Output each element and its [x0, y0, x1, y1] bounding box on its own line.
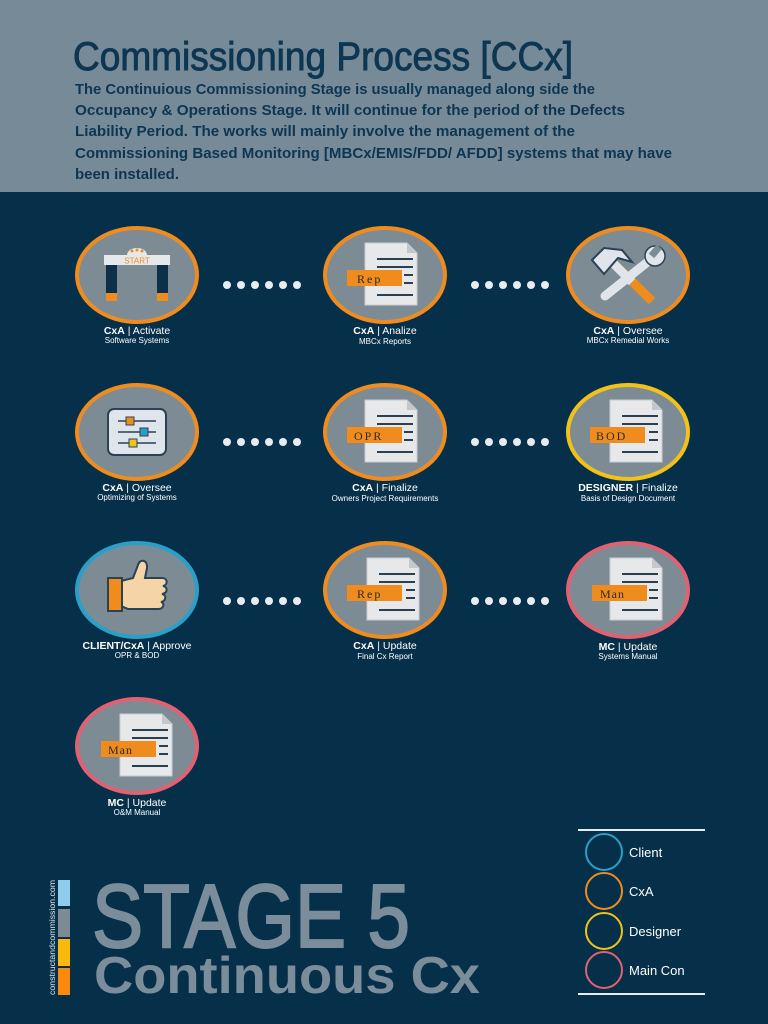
step: update final Cx report: CxA | Update [353, 640, 417, 652]
intro paragraph: been installed. [75, 166, 179, 183]
legend: Client [629, 845, 663, 860]
step: update O&M manual: MC | Update [108, 797, 167, 809]
step: approve OPR & BOD: CLIENT/CxA | Approve [83, 640, 192, 652]
step: oversee remedial works: MBCx Remedial Works [587, 336, 669, 345]
legend [578, 830, 705, 994]
step: update final Cx report [325, 543, 445, 661]
step: finalize OPR [325, 385, 445, 503]
step: update systems manual: Systems Manual [598, 652, 658, 661]
icon: start gate: START [124, 256, 150, 266]
step: finalize BOD [568, 385, 688, 503]
legend: Main Con [629, 963, 685, 978]
icon: thumbs up [108, 561, 167, 611]
step: oversee remedial works [568, 228, 688, 345]
step: optimizing of systems: CxA | Oversee [102, 482, 172, 494]
step: analize MBCx reports: CxA | Analize [353, 325, 417, 337]
color bar strip [58, 880, 70, 995]
step: optimizing of systems [77, 385, 197, 502]
step: update O&M manual [77, 699, 197, 817]
stage heading: STAGE 5 [92, 867, 410, 967]
intro paragraph: Occupancy & Operations Stage. It will continue for the period of the Defects [75, 102, 625, 119]
step: update systems manual [568, 543, 688, 661]
step: activate software systems: CxA | Activate [104, 325, 170, 337]
step: analize MBCx reports: MBCx Reports [359, 337, 411, 346]
step: finalize BOD: BOD [596, 429, 627, 443]
step: finalize BOD: Basis of Design Document [581, 494, 676, 503]
legend: CxA [629, 884, 654, 899]
intro paragraph: Liability Period. The works will mainly involve the management of the [75, 123, 575, 140]
website side label: constructandcommission.com [48, 880, 57, 995]
stage subtitle: Continuous Cx [94, 947, 480, 1005]
step: approve OPR & BOD: OPR & BOD [115, 651, 159, 660]
step: update O&M manual: Man [108, 743, 133, 757]
intro paragraph: The Continuious Commissioning Stage is usually managed along side the [75, 81, 595, 98]
legend: Designer [629, 924, 682, 939]
icon: hammer and wrench [592, 244, 665, 301]
step: update final Cx report: Final Cx Report [357, 652, 414, 661]
icon: sliders panel [108, 409, 166, 455]
step: finalize OPR: OPR [354, 429, 383, 443]
step: approve OPR & BOD [77, 543, 197, 660]
intro paragraph: Commissioning Based Monitoring [MBCx/EMIS/FDD/ AFDD] systems that may have [75, 145, 672, 162]
title: Commissioning Process [CCx] [73, 35, 573, 79]
intro paragraph [75, 81, 672, 183]
step: activate software systems: Software Systems [105, 336, 169, 345]
step: update final Cx report: Rep [357, 587, 382, 601]
step: analize MBCx reports: Rep [357, 272, 382, 286]
step: update O&M manual: O&M Manual [114, 808, 161, 817]
step: activate software systems [77, 228, 197, 345]
step: oversee remedial works: CxA | Oversee [593, 325, 663, 337]
header panel [0, 0, 768, 192]
step: optimizing of systems: Optimizing of Systems [97, 493, 177, 502]
step: update systems manual: MC | Update [599, 641, 658, 653]
step: analize MBCx reports [325, 228, 445, 346]
step: finalize BOD: DESIGNER | Finalize [578, 482, 678, 494]
dot connectors [223, 281, 549, 605]
step: finalize OPR: Owners Project Requirements [332, 494, 438, 503]
step: update systems manual: Man [600, 587, 625, 601]
step: finalize OPR: CxA | Finalize [352, 482, 418, 494]
